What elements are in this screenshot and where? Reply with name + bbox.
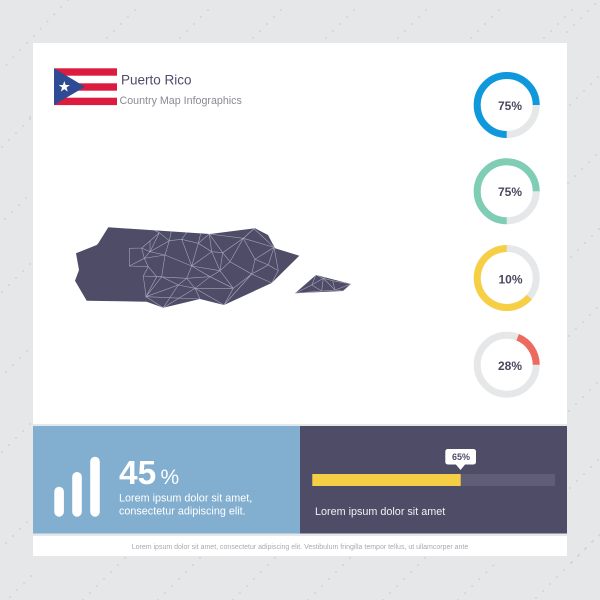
- donut chart: 28% red: [477, 335, 536, 394]
- progress caption: Lorem ipsum dolor sit amet: [315, 506, 445, 518]
- map: main island: [75, 227, 299, 308]
- statistic: 45 percent: [119, 455, 179, 492]
- footer text: Lorem ipsum dolor sit amet, consectetur adipiscing elit. Vestibulum fringilla tempor tellus, ut ullamcorper ante: [132, 544, 468, 551]
- panel: footer strip: [33, 536, 567, 556]
- donut chart: 10% yellow: [477, 248, 536, 308]
- map: eastern island: [295, 275, 351, 293]
- donut chart: 75% blue: [477, 75, 536, 134]
- statistic: 45 percent: 45: [119, 455, 156, 492]
- panel: blue statistic: [33, 426, 300, 534]
- donut chart: 10% yellow: 10%: [498, 272, 523, 286]
- callout: 65 percent: [445, 449, 476, 470]
- panel: main white card: [33, 43, 567, 424]
- donut chart: 75% green: [477, 162, 536, 221]
- icon: rising bars: [54, 457, 100, 517]
- panel: dark progress: [300, 426, 567, 534]
- text block: statistic description: Lorem ipsum dolor sit amet,: [119, 493, 252, 505]
- donut chart: 28% red: 28%: [498, 359, 522, 373]
- donut chart: 75% blue: 75%: [498, 99, 522, 113]
- text block: statistic description: [119, 493, 252, 517]
- subtitle: Country Map Infographics: [120, 95, 242, 107]
- progress bar track: [312, 474, 555, 486]
- map: Puerto Rico polygon map: [75, 227, 351, 308]
- text block: statistic description: consectetur adipiscing elit.: [119, 505, 246, 517]
- title: Puerto Rico: [121, 72, 192, 88]
- progress bar fill: [312, 474, 461, 486]
- callout: 65 percent: 65%: [452, 452, 470, 462]
- donut chart: 75% green: 75%: [498, 185, 522, 199]
- statistic: 45 percent: %: [160, 466, 179, 489]
- icon: Puerto Rico flag: [54, 68, 117, 105]
